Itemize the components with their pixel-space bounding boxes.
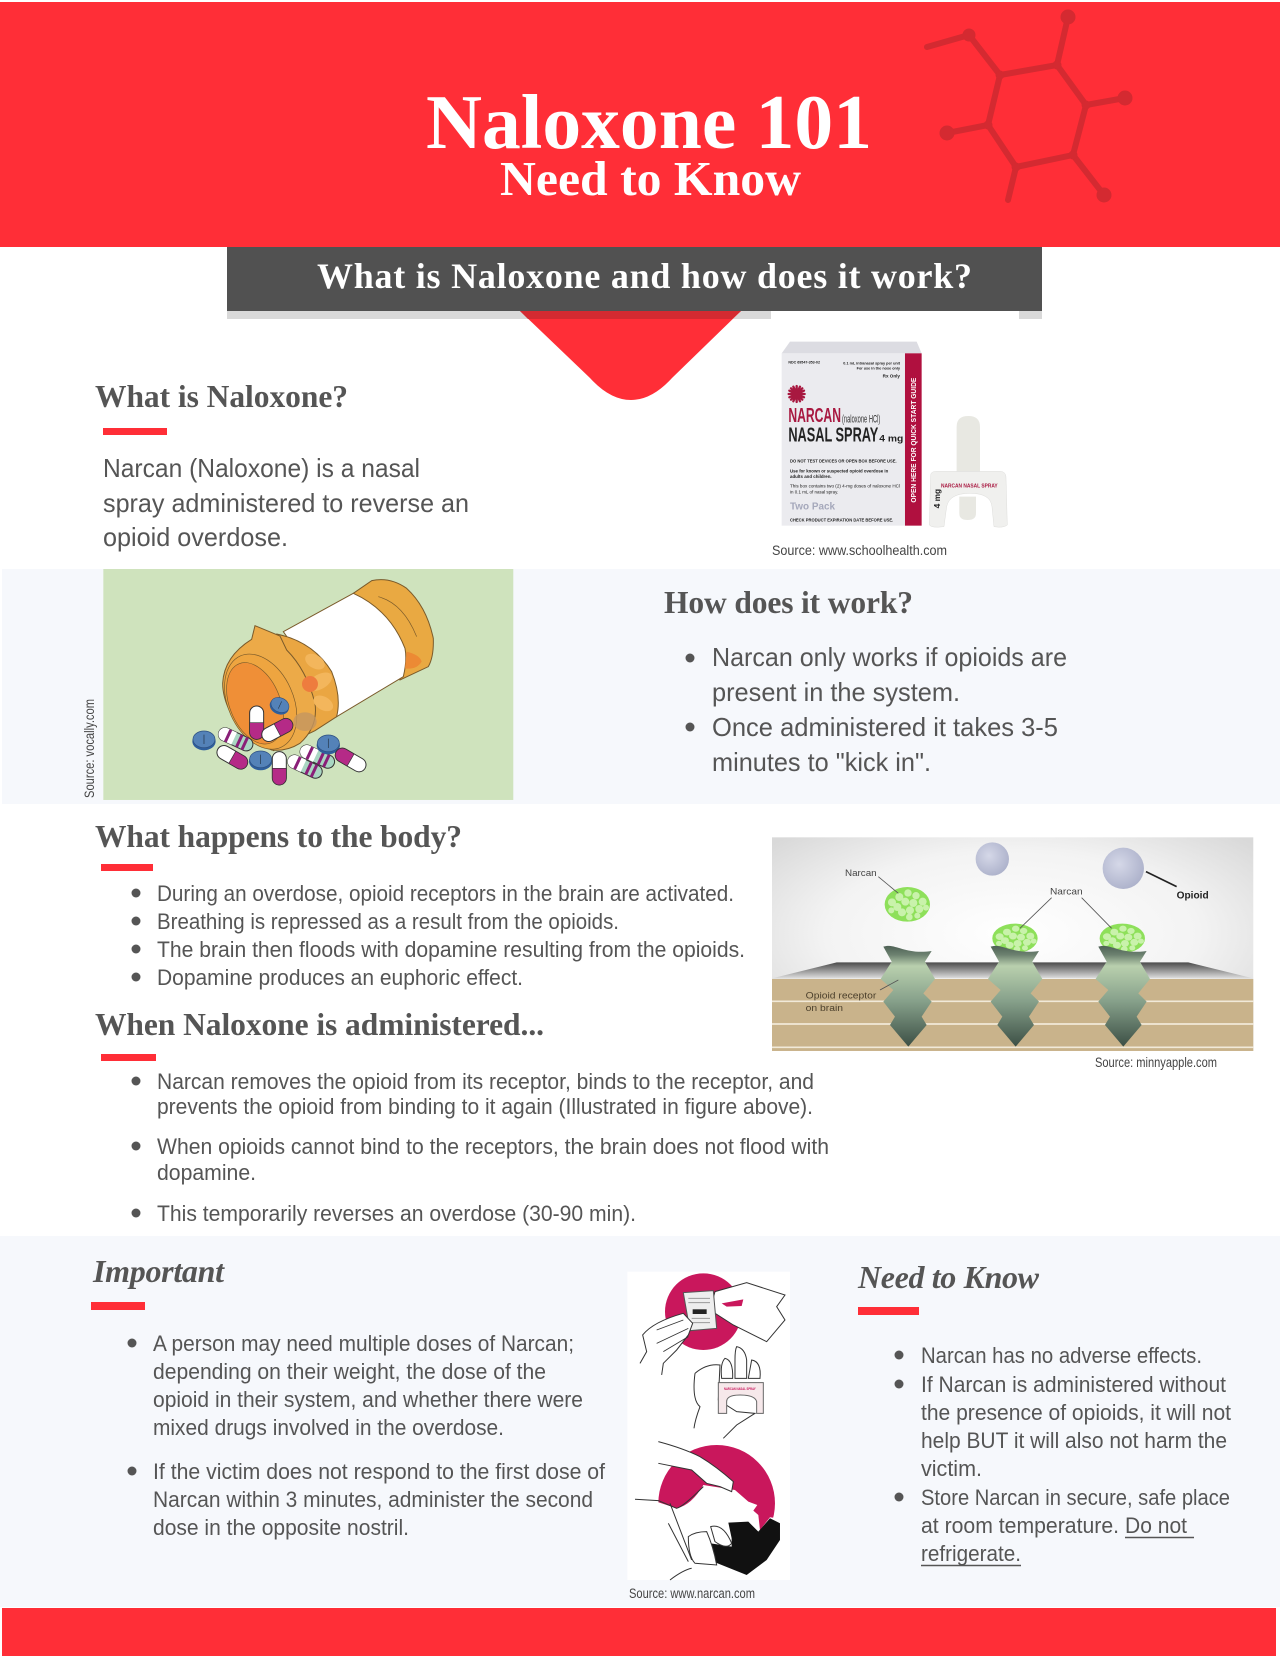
image: narcan box and spray: (naloxone HCl) — [842, 414, 880, 426]
list: how it works: Once administered it takes 3-5 — [712, 712, 1058, 742]
list: need to know: Store Narcan in secure, safe place — [921, 1485, 1230, 1510]
list: important: Narcan within 3 minutes, administer the second — [153, 1487, 593, 1512]
image: narcan box and spray: 0.1 mL intranasal spray per unit — [843, 361, 901, 365]
accent rule — [101, 1054, 156, 1061]
list: need to know: Narcan has no adverse effects. — [921, 1343, 1202, 1368]
image: receptor diagram — [772, 837, 1253, 1051]
list: important: If the victim does not respond to the first dose of — [153, 1459, 606, 1484]
list: how it works: minutes to "kick in". — [712, 747, 931, 777]
text: definition: Narcan (Naloxone) is a nasal — [103, 453, 420, 483]
list: need to know: the presence of opioids, it will not — [921, 1400, 1232, 1425]
heading: important: Important — [92, 1253, 225, 1289]
text: definition — [103, 453, 469, 552]
list: when administered: prevents the opioid from binding to it again (Illustrated in figure above). — [157, 1094, 813, 1119]
image: narcan box and spray: NDC 69547-353-02 — [788, 360, 820, 364]
image: narcan box and spray — [782, 342, 1007, 527]
image: narcan box and spray: 4 mg — [879, 433, 904, 443]
heading: how does it work: How does it work? — [664, 585, 913, 620]
list: need to know: If Narcan is administered without — [921, 1372, 1227, 1397]
section heading: What is Naloxone and how does it work? — [317, 256, 972, 296]
icon: molecule — [927, 10, 1132, 202]
shadow under section banner — [227, 311, 1042, 319]
list: how it works — [686, 642, 1067, 777]
accent rule — [101, 864, 153, 871]
image: narcan box and spray: OPEN HERE FOR QUICK START GUIDE — [911, 377, 918, 503]
heading: what happens to the body: What happens to the body? — [95, 819, 462, 854]
list: need to know: refrigerate. — [921, 1541, 1021, 1566]
red pointer — [520, 311, 741, 400]
band: how it works background — [2, 569, 1280, 804]
heading: when naloxone is administered: When Naloxone is administered... — [95, 1007, 544, 1042]
section banner — [227, 247, 1042, 311]
image: narcan box and spray: NARCAN NASAL SPRAY — [941, 483, 998, 489]
list: when administered: This temporarily reverses an overdose (30-90 min). — [157, 1201, 636, 1226]
image: narcan box and spray: DO NOT TEST DEVICES OR OPEN BOX BEFORE USE. — [790, 459, 897, 464]
image: administering narcan steps — [627, 1272, 790, 1580]
list: when administered: dopamine. — [157, 1160, 256, 1185]
image: narcan box and spray: in 0.1 mL of nasal spray. — [790, 489, 838, 494]
list: when administered: When opioids cannot bind to the receptors, the brain does not flood with — [157, 1134, 829, 1159]
footer bar — [2, 1608, 1276, 1656]
image: narcan box and spray: Use for known or suspected opioid overdose in — [790, 469, 888, 474]
source: narcan: Source: www.narcan.com — [629, 1586, 755, 1601]
list: how it works: Narcan only works if opioids are — [712, 642, 1067, 672]
heading: what is naloxone: What is Naloxone? — [95, 379, 348, 414]
heading: need to know: Need to Know — [857, 1259, 1040, 1295]
list: how it works: present in the system. — [712, 677, 960, 707]
image: narcan box and spray: This box contains two (2) 4-mg doses of naloxone HCl — [790, 484, 900, 489]
accent rule — [858, 1307, 919, 1315]
image: narcan box and spray: Rx Only — [883, 373, 901, 378]
image: receptor diagram: Opioid — [1177, 890, 1209, 901]
list: when administered — [132, 1069, 829, 1226]
image: narcan box and spray: NASAL SPRAY — [788, 424, 878, 446]
list: need to know: Do not — [1125, 1513, 1188, 1538]
text: definition: opioid overdose. — [103, 522, 288, 552]
image: receptor diagram: Narcan — [1050, 886, 1083, 896]
list: important: mixed drugs involved in the overdose. — [153, 1415, 504, 1440]
source: school health: Source: www.schoolhealth.com — [772, 543, 947, 558]
list: what happens: The brain then floods with dopamine resulting from the opioids. — [157, 937, 745, 962]
list: important: depending on their weight, the dose of the — [153, 1359, 546, 1384]
list: important: opioid in their system, and whether there were — [153, 1387, 583, 1412]
list: need to know: help BUT it will also not harm the — [921, 1428, 1227, 1453]
image: spilled pill bottle — [103, 569, 513, 800]
source: vocally: Source: vocally.com — [82, 699, 97, 798]
image: narcan box and spray: CHECK PRODUCT EXPIRATION DATE BEFORE USE. — [790, 517, 893, 522]
image: narcan box and spray: 4 mg — [932, 489, 942, 508]
list: need to know — [894, 1343, 1232, 1566]
band: important background — [0, 1236, 1280, 1607]
list: important: A person may need multiple doses of Narcan; — [153, 1331, 574, 1356]
image: administering narcan steps: NARCAN NASAL SPRAY — [724, 1386, 756, 1391]
image: narcan box and spray: Two Pack — [790, 501, 835, 512]
text: definition: spray administered to reverse an — [103, 488, 469, 518]
source: minnyapple: Source: minnyapple.com — [1095, 1055, 1217, 1070]
list: important — [128, 1331, 606, 1540]
image: narcan box and spray: For use in the nose only — [857, 367, 901, 371]
list: what happens: During an overdose, opioid receptors in the brain are activated. — [157, 881, 734, 906]
accent rule — [91, 1302, 145, 1310]
list: when administered: Narcan removes the opioid from its receptor, binds to the receptor, and — [157, 1069, 814, 1094]
image: receptor diagram: Opioid receptor — [806, 990, 876, 1000]
list: what happens: Dopamine produces an euphoric effect. — [157, 965, 523, 990]
list: what happens: Breathing is repressed as a result from the opioids. — [157, 909, 619, 934]
image: receptor diagram: Narcan — [845, 868, 877, 878]
list: need to know: at room temperature. — [921, 1513, 1119, 1538]
subtitle: Need to Know — [500, 151, 802, 206]
image: receptor diagram: on brain — [806, 1003, 843, 1013]
list: what happens — [132, 881, 745, 990]
image: narcan box and spray: NARCAN — [788, 404, 841, 427]
header banner — [0, 2, 1280, 247]
title: Naloxone 101 — [426, 79, 872, 165]
list: important: dose in the opposite nostril. — [153, 1515, 409, 1540]
image: narcan box and spray: adults and children. — [790, 474, 832, 479]
accent rule — [103, 428, 167, 435]
list: need to know: victim. — [921, 1456, 982, 1481]
